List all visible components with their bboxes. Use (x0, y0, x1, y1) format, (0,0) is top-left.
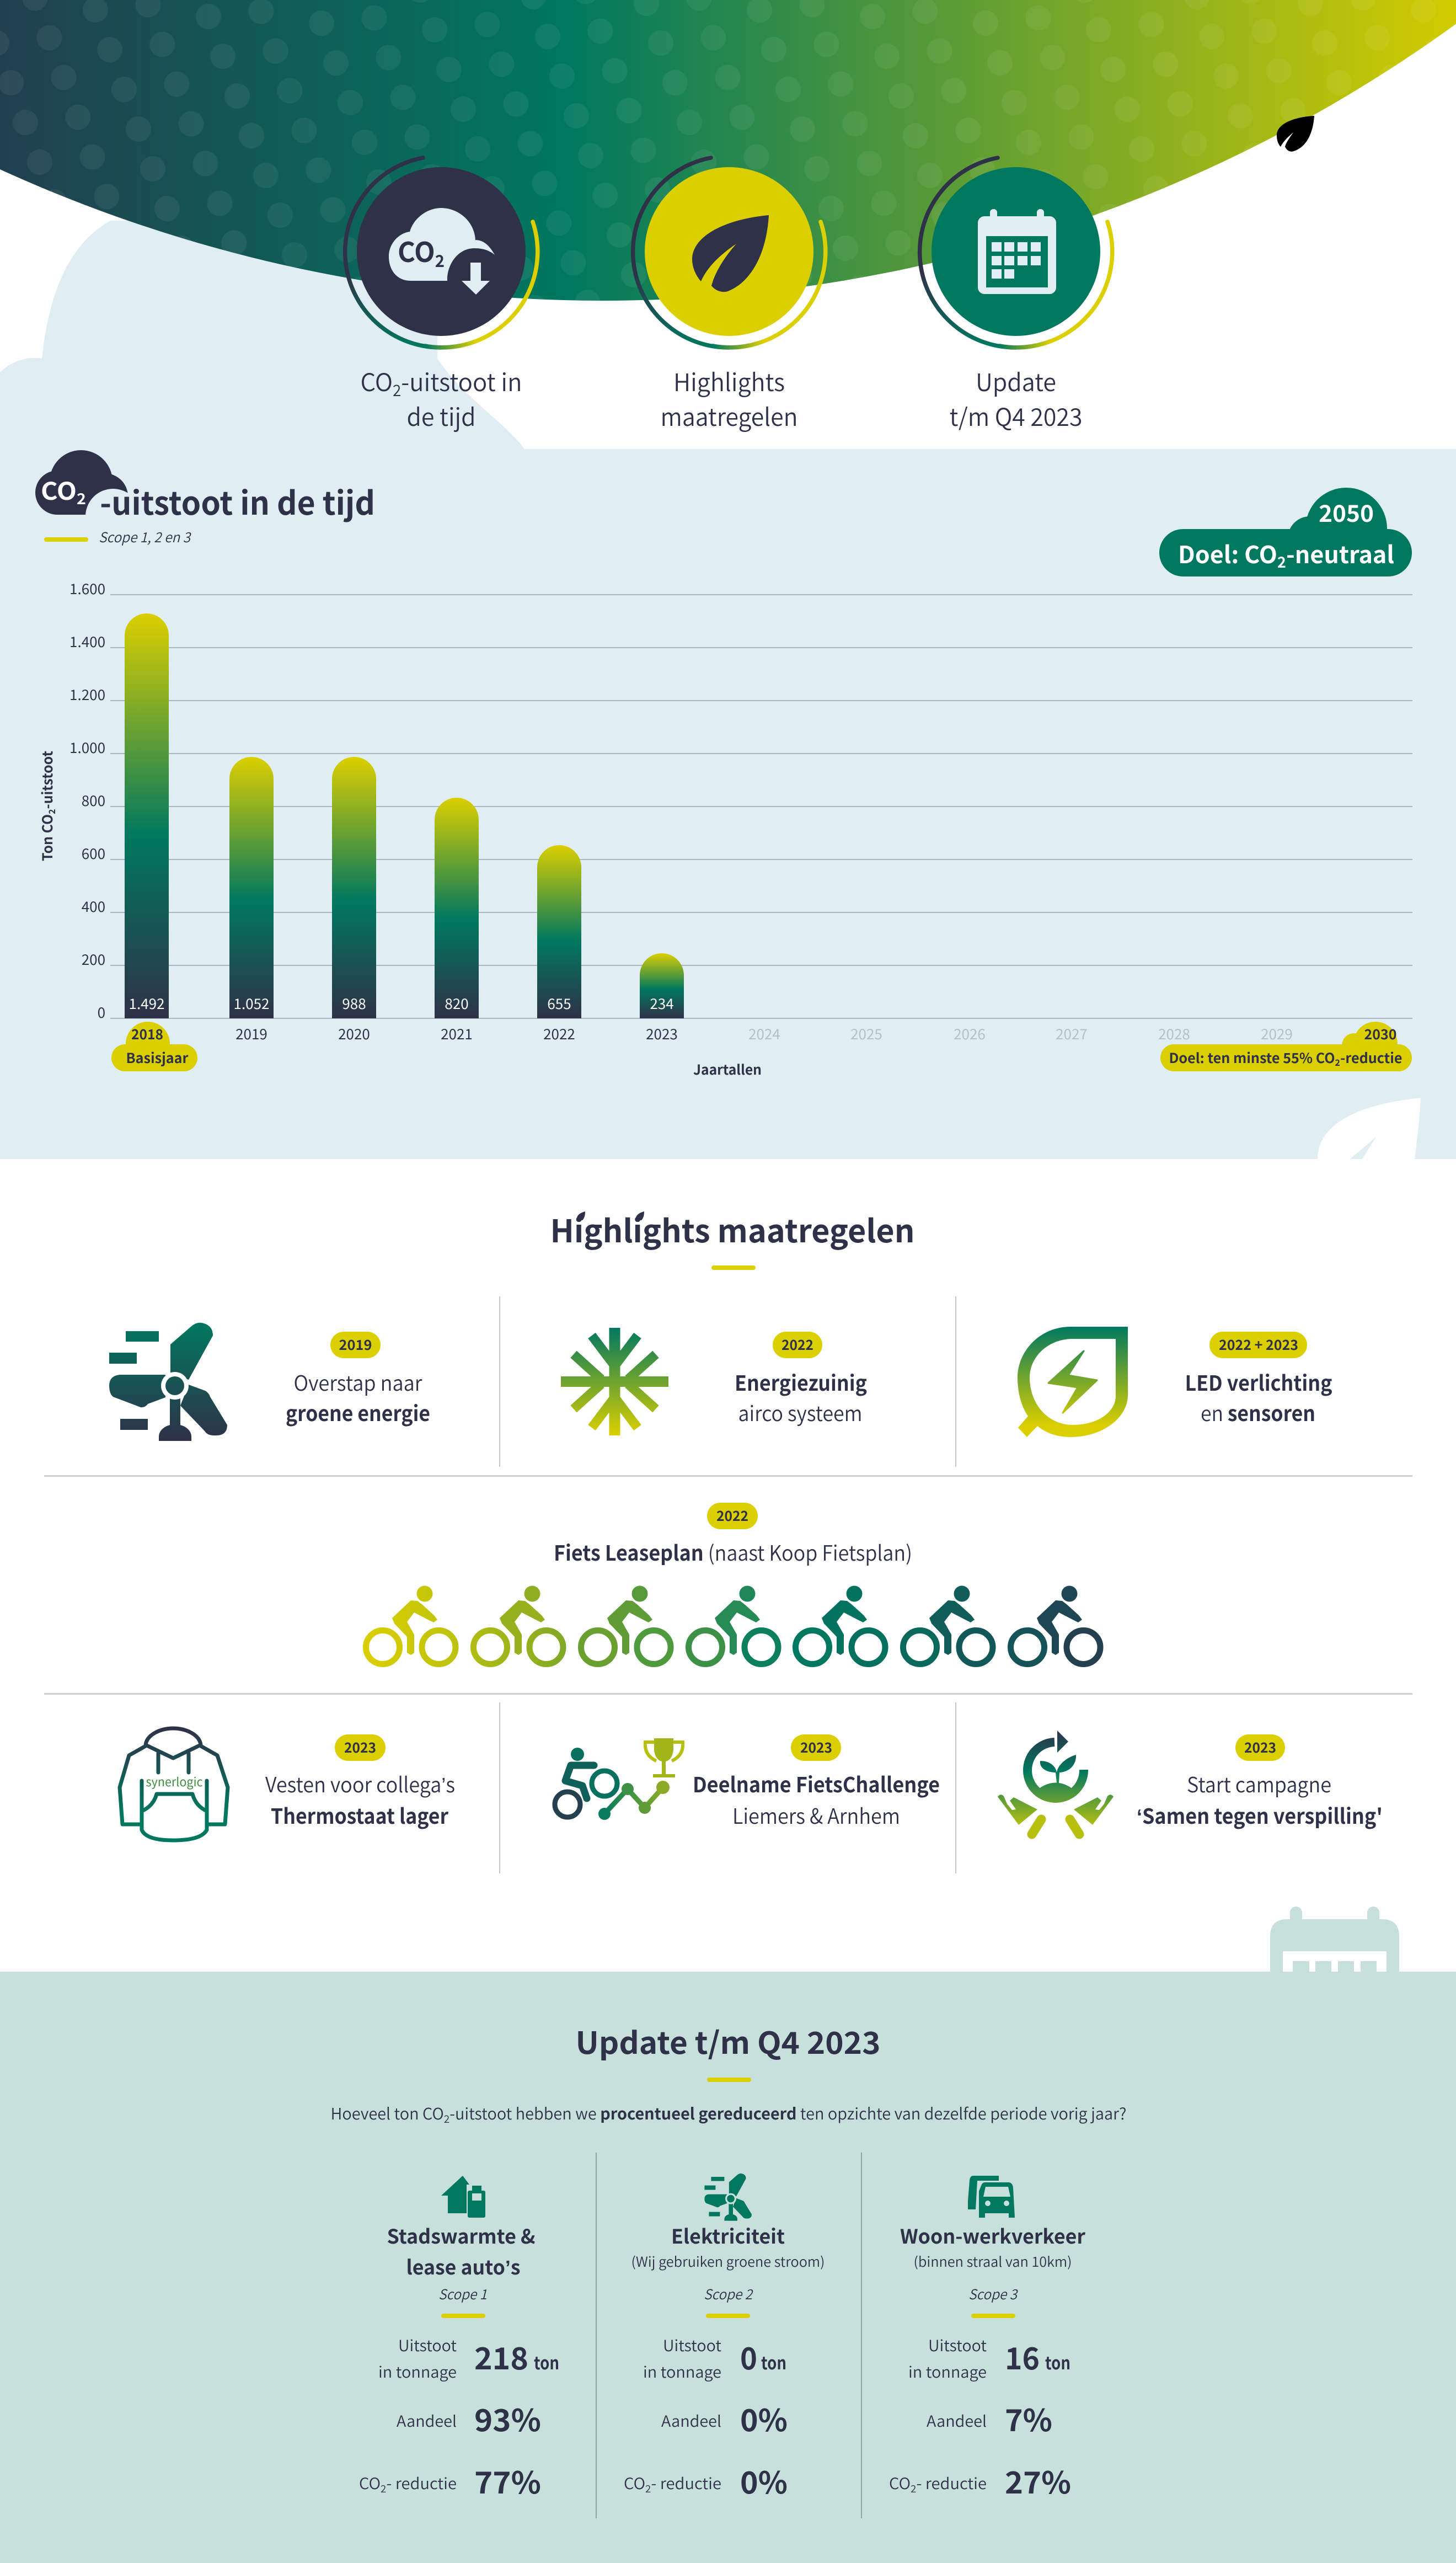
stats: scope 1: in tonnage (378, 2361, 457, 2383)
legend: scope line (44, 527, 191, 547)
stats: scope 1: 77% (474, 2458, 541, 2502)
heading: update (576, 2019, 880, 2082)
bar chart: 2024 (748, 1023, 780, 1044)
stats: scope 3: Aandeel (927, 2410, 987, 2432)
icon: small turbine (704, 2174, 752, 2221)
badge: 2022 + 2023 (1209, 1332, 1307, 1358)
hero gradient ellipse with dots (0, 0, 1456, 301)
text: LED: en sensoren (1201, 1397, 1315, 1427)
stats: scope 2: 0% (740, 2458, 788, 2502)
bar chart: 2 (45, 809, 58, 814)
nav label: CO2: de tijd (407, 398, 475, 433)
bar chart: 200 (82, 949, 105, 969)
bar chart: 988 (342, 993, 366, 1013)
bar chart: 2026 (954, 1023, 986, 1044)
stats: scope 1: 218 (474, 2334, 528, 2378)
stats: scope 1: CO (359, 2472, 380, 2494)
bar chart: 0 (98, 1002, 105, 1022)
bar chart: 1.492 (129, 993, 164, 1013)
bar chart: 1.052 (234, 993, 269, 1013)
icon row: cyclists (366, 1585, 1100, 1664)
heading: update: Update t/m Q4 2023 (576, 2019, 880, 2063)
stats: scope 3: 16 (1005, 2334, 1040, 2378)
bar chart: Jaartallen (693, 1059, 762, 1079)
stats: scope 1 (359, 2334, 559, 2502)
badge: 2019: 2019 (339, 1334, 372, 1354)
stats: scope 3 (889, 2334, 1071, 2502)
text: challenge (693, 1768, 940, 1830)
callout: 2050 goal: 2 (1277, 551, 1286, 572)
panel: CO2 chart background (0, 449, 1456, 1159)
cyclist 4 (688, 1585, 778, 1664)
badge: 2022: 2022 (781, 1334, 813, 1354)
nav label: CO2: 2 (393, 379, 401, 401)
badge: 2023 vesten (335, 1734, 386, 1761)
bar chart: 655 (547, 993, 571, 1013)
icon: title cloud with CO2: CO (41, 472, 74, 507)
nav icon: calendar (920, 158, 1112, 348)
nav label: CO2: -uitstoot in (401, 363, 522, 398)
nav label: update (950, 363, 1082, 433)
cyclist 7 (1010, 1585, 1100, 1664)
text: fiets leaseplan: Fiets Leaseplan (naast Koop Fietsplan) (554, 1536, 912, 1567)
icon: hoodie (120, 1728, 228, 1840)
badge: 2023 campagne (1235, 1734, 1285, 1761)
panel: update (0, 1972, 1456, 2563)
stats: scope 2: Uitstoot (663, 2334, 721, 2356)
bar chart (37, 578, 1412, 1079)
text: vesten (265, 1768, 455, 1830)
icon: snowflake (561, 1328, 668, 1435)
nav label: highlights (661, 363, 797, 433)
bar chart: 600 (82, 843, 105, 863)
text: campagne: ‘Samen tegen verspilling' (1137, 1800, 1383, 1830)
icon: fietschallenge (555, 1738, 683, 1820)
intro text: 2 (444, 2111, 449, 2126)
callout: 2050 goal (1159, 488, 1412, 576)
nav icon: leaf (633, 158, 826, 348)
stats: scope 2: ton (761, 2350, 786, 2375)
decoration: white leaf (1318, 1098, 1421, 1159)
heading: highlights: Highlights maatregelen (550, 1206, 914, 1252)
column: woon-werkverkeer header (900, 2221, 1085, 2318)
text: campagne: Start campagne (1187, 1768, 1331, 1798)
nav icon: CO2 cloud: 2 (435, 248, 445, 272)
intro text: Hoeveel ton CO (331, 2101, 445, 2124)
text: campagne (1137, 1768, 1383, 1830)
bar chart: 2019 (235, 1023, 267, 1044)
text: challenge: Deelname FietsChallenge (693, 1768, 940, 1798)
intro text: procentueel gereduceerd ten opzichte van dezelfde periode vorig jaar? (600, 2101, 1128, 2124)
cyclist 3 (581, 1585, 671, 1664)
callout: 2030 goal: 2 (1335, 1055, 1340, 1069)
column: woon-werkverkeer header: (binnen straal van 10km) (913, 2251, 1072, 2271)
bar chart: 2028 (1158, 1023, 1190, 1044)
bar chart: 2027 (1056, 1023, 1088, 1044)
bar chart: 1.000 (69, 737, 105, 757)
bar chart: 1.400 (69, 631, 105, 652)
callout: 2050 goal: -neutraal (1286, 536, 1394, 570)
stats: scope 1: 2 (381, 2481, 386, 2496)
nav label: highlights: maatregelen (661, 398, 797, 433)
callout: 2030 goal: -reductie (1340, 1048, 1402, 1067)
nav icon: CO2 cloud (345, 158, 538, 348)
callout: 2050 goal: Doel: CO (1178, 536, 1277, 570)
bar chart: -uitstoot (37, 751, 57, 809)
icon: LED leaf (1018, 1327, 1128, 1437)
nav label: update: Update (976, 363, 1056, 398)
stats: scope 3: CO (889, 2472, 910, 2494)
stats: scope 2: - reductie (651, 2472, 721, 2494)
nav label: highlights: Highlights (673, 363, 785, 398)
column: woon-werkverkeer header: Scope 3 (968, 2284, 1018, 2304)
stats: scope 2: 2 (645, 2481, 651, 2496)
legend: scope line: Scope 1, 2 en 3 (99, 527, 191, 547)
text: groene energie: groene energie (286, 1397, 430, 1427)
bar chart: 234 (650, 993, 674, 1013)
bar chart: 1.600 (69, 578, 105, 599)
heading: CO2 in de tijd: -uitstoot in de tijd (100, 478, 375, 524)
bar chart: 2022 (543, 1023, 575, 1044)
badge: 2022 + 2023: 2022 + 2023 (1219, 1334, 1298, 1354)
icon: campagne hands and sprout (998, 1731, 1114, 1834)
bar chart: 1.200 (69, 684, 105, 704)
callout: 2018 basisjaar: 2018 (131, 1024, 163, 1044)
callout: 2018 basisjaar (111, 1022, 197, 1071)
background cloud: light blue behind icons (0, 221, 524, 449)
stats: scope 3: in tonnage (908, 2361, 987, 2383)
icon: hoodie: synerlogic (146, 1772, 203, 1790)
column: woon-werkverkeer header: Woon-werkverkeer (900, 2221, 1085, 2250)
badge: 2019 (330, 1332, 381, 1358)
column: stadswarmte header: Stadswarmte & (387, 2221, 535, 2250)
stats: scope 2: 0% (740, 2396, 788, 2440)
callout: 2030 goal: Doel: ten minste 55% CO (1169, 1048, 1334, 1067)
column: stadswarmte header (387, 2221, 535, 2318)
bar chart: 2021 (441, 1023, 473, 1044)
icon: title cloud with CO2 (35, 450, 143, 544)
decoration: faint calendar (1270, 1907, 1399, 1972)
text: LED (1185, 1366, 1332, 1427)
callout: 2018 basisjaar: Basisjaar (126, 1048, 189, 1067)
column: elektriciteit header: Elektriciteit (671, 2221, 785, 2250)
stats: scope 2: Aandeel (661, 2410, 721, 2432)
bar chart: Ton CO (37, 814, 57, 861)
bar chart: 820 (445, 993, 469, 1013)
text: groene energie (286, 1366, 430, 1427)
stats: scope 1: - reductie (386, 2472, 457, 2494)
intro text: -uitstoot hebben we (449, 2101, 600, 2124)
text: groene energie: Overstap naar (293, 1366, 422, 1397)
badge: 2023 challenge (791, 1734, 841, 1761)
stats: scope 1: 93% (474, 2396, 541, 2440)
bar chart: 2025 (850, 1023, 882, 1044)
stats: scope 1: ton (534, 2350, 559, 2375)
stats: scope 3: Uitstoot (928, 2334, 987, 2356)
column: stadswarmte header: lease auto’s (406, 2252, 521, 2281)
callout: 2050 goal: 2050 (1319, 495, 1374, 529)
text: airco (735, 1366, 867, 1427)
text: airco: Energiezuinig (735, 1366, 867, 1397)
bar chart: 2020 (338, 1023, 370, 1044)
text: vesten: Vesten voor collega’s (265, 1768, 455, 1798)
stats: scope 2: 0 (740, 2334, 757, 2378)
bar chart: 800 (82, 790, 105, 810)
text: challenge: Liemers & Arnhem (732, 1800, 900, 1830)
cyclist 6 (903, 1585, 993, 1664)
column: stadswarmte header: Scope 1 (438, 2284, 487, 2304)
stats: scope 3: 2 (911, 2481, 916, 2496)
stats: scope 1: Uitstoot (398, 2334, 457, 2356)
icon: wind turbine (109, 1323, 227, 1441)
bar chart: 2023 (646, 1023, 678, 1044)
cyclist 1 (366, 1585, 456, 1664)
icon: title cloud with CO2: 2 (77, 487, 86, 509)
icon: house and battery (441, 2176, 485, 2218)
badge: 2022 fiets (707, 1503, 758, 1529)
text: LED: LED verlichting (1185, 1366, 1332, 1397)
badge: 2022 (773, 1332, 822, 1358)
column: elektriciteit header: (Wij gebruiken groene stroom) (631, 2251, 825, 2271)
stats: scope 2 (624, 2334, 788, 2502)
callout: 2030 goal: 2030 (1364, 1024, 1396, 1044)
column: elektriciteit header (631, 2221, 825, 2318)
stats: scope 2: in tonnage (643, 2361, 721, 2383)
callout: 2030 goal (1160, 1022, 1412, 1071)
badge: 2023 challenge: 2023 (800, 1737, 832, 1757)
stats: scope 2: CO (624, 2472, 645, 2494)
nav icon: CO2 cloud: CO (398, 231, 436, 270)
stats: scope 3: ton (1045, 2350, 1070, 2375)
stats: scope 1: Aandeel (397, 2410, 457, 2432)
bar chart: 400 (82, 896, 105, 916)
icon: cars (968, 2176, 1015, 2218)
nav label: CO2 (361, 363, 522, 433)
text: airco: airco systeem (738, 1397, 863, 1427)
bar chart: 2029 (1261, 1023, 1293, 1044)
badge: 2023 vesten: 2023 (344, 1737, 376, 1757)
column: elektriciteit header: Scope 2 (704, 2284, 753, 2304)
stats: scope 3: 7% (1005, 2396, 1052, 2440)
cyclist 2 (473, 1585, 563, 1664)
text: vesten: Thermostaat lager (271, 1800, 448, 1830)
stats: scope 3: 27% (1005, 2458, 1071, 2502)
stats: scope 3: - reductie (916, 2472, 987, 2494)
icon: black leaf on hero edge (1277, 116, 1314, 152)
nav label: update: t/m Q4 2023 (950, 398, 1082, 433)
nav label: CO2: CO (361, 363, 393, 398)
badge: 2022 fiets: 2022 (716, 1505, 748, 1525)
cyclist 5 (795, 1585, 885, 1664)
badge: 2023 campagne: 2023 (1244, 1737, 1276, 1757)
